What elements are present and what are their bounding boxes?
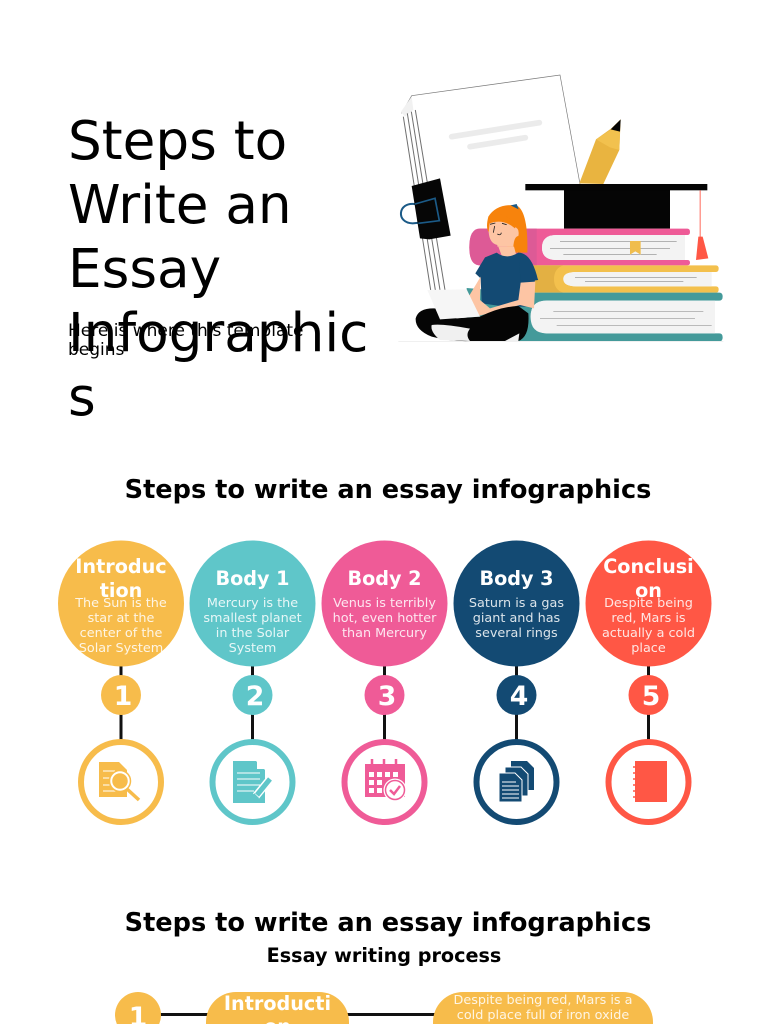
subtitle: begins <box>68 340 125 360</box>
step 2 icon: document pencil <box>212 742 292 822</box>
step 5 title <box>603 555 694 602</box>
title: s <box>68 366 96 428</box>
step 2 description: System <box>229 641 276 656</box>
step 1 number <box>101 675 141 715</box>
step 3 description <box>333 596 437 641</box>
step 1 icon: document magnifier <box>81 742 161 822</box>
icon: graduation cap <box>525 184 708 260</box>
heading: steps: Steps to write an essay infographics <box>125 475 651 505</box>
step 3 icon: calendar <box>344 742 424 822</box>
process pill: description: cold place full of iron oxide <box>457 1008 629 1023</box>
step 3 number: 3 <box>378 681 396 712</box>
step 2 description: in the Solar <box>216 626 290 641</box>
illustration: teal book <box>467 288 723 341</box>
process pill: Introduction <box>206 992 349 1024</box>
step 1: Introduction <box>58 540 184 822</box>
subtitle: Here is where this template <box>68 321 304 341</box>
step 2 description <box>203 596 302 656</box>
title: Essay <box>68 238 221 300</box>
step 5 number <box>628 675 668 715</box>
title <box>68 110 368 428</box>
process pill: description: Despite being red, Mars is a <box>453 993 633 1008</box>
process pill: Introduction: Introducti <box>224 992 331 1015</box>
step 1 number: 1 <box>114 681 132 712</box>
title: Write an <box>68 174 292 236</box>
illustration: large paper stack <box>401 75 581 293</box>
subtitle <box>68 321 304 360</box>
step 5 description: actually a cold <box>602 626 695 641</box>
step 1 title: tion <box>100 579 142 602</box>
step 5: Conclusion <box>586 540 712 822</box>
illustration: pink book <box>469 229 690 265</box>
step 5 description: red, Mars is <box>611 611 686 626</box>
step 5 description <box>602 596 695 656</box>
process pill: description <box>433 992 653 1024</box>
step 4 description <box>469 596 564 641</box>
step 1 description: center of the <box>80 626 162 641</box>
step 2 number <box>232 675 272 715</box>
step 2 description: smallest planet <box>203 611 302 626</box>
step 3 number <box>364 675 404 715</box>
step 2: Body 1 <box>190 540 316 822</box>
process number 1 <box>115 992 161 1024</box>
icon: binder clip <box>401 178 451 239</box>
illustration: yellow book <box>533 265 719 293</box>
step 5 number: 5 <box>642 681 660 712</box>
step 5 title: on <box>635 579 662 602</box>
step 2 circle <box>190 540 316 666</box>
step 4 title: Body 3 <box>479 567 554 590</box>
step 5 description: Despite being <box>604 596 693 611</box>
step 3 circle <box>322 540 448 666</box>
step 1 description <box>74 596 167 656</box>
step 4: Body 3 <box>454 540 580 822</box>
step 1 description: Solar System <box>79 641 163 656</box>
step 4 description: several rings <box>475 626 558 641</box>
step 3: Body 2 <box>322 540 448 822</box>
step 4 description: Saturn is a gas <box>469 596 564 611</box>
subheading: essay writing process: Essay writing process <box>267 944 501 967</box>
step 1 description: star at the <box>88 611 155 626</box>
step 4 circle <box>454 540 580 666</box>
illustration: student with books <box>398 75 723 342</box>
step 4 number <box>496 675 536 715</box>
step 3 title: Body 2 <box>347 567 422 590</box>
step 4 icon: documents <box>476 742 556 822</box>
step 4 number: 4 <box>510 681 528 712</box>
step 1 title <box>75 555 167 602</box>
illustration: girl <box>416 204 538 341</box>
step 3 description: hot, even hotter <box>333 611 437 626</box>
step 3 description: than Mercury <box>342 626 427 641</box>
step 1 circle <box>58 540 184 666</box>
step 4 description: giant and has <box>473 611 561 626</box>
title: Infographic <box>68 302 368 364</box>
step 5 description: place <box>631 641 666 656</box>
heading: second section: Steps to write an essay infographics <box>125 908 651 938</box>
step 2 description: Mercury is the <box>207 596 298 611</box>
step 5 title: Conclusi <box>603 555 694 578</box>
step 5 circle <box>586 540 712 666</box>
icon: pencil <box>579 119 621 184</box>
step 5 icon: notebook <box>608 742 688 822</box>
step 2 number: 2 <box>246 681 264 712</box>
process row 1 <box>115 992 653 1024</box>
step 2 title: Body 1 <box>215 567 290 590</box>
step 3 description: Venus is terribly <box>333 596 436 611</box>
illustration: ground line <box>398 340 723 343</box>
title: Steps to <box>68 110 287 172</box>
step 1 description: The Sun is the <box>74 596 167 611</box>
step 1 title: Introduc <box>75 555 167 578</box>
